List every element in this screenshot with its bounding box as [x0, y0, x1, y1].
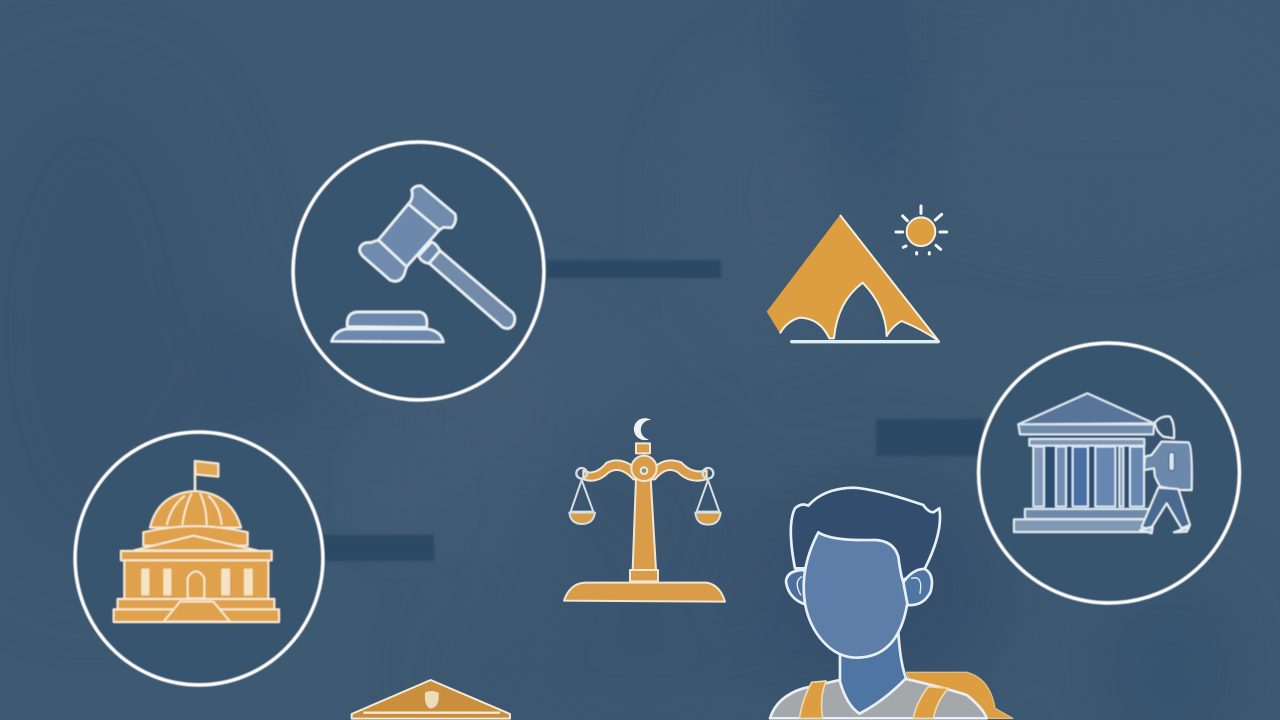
- panel: courthouse and student circle: [978, 343, 1240, 603]
- neck: [840, 632, 906, 714]
- crescent: [634, 418, 651, 440]
- panel: gavel circle: [293, 142, 544, 400]
- icon: student with backpack: [770, 488, 1013, 718]
- icon: tent-like mountain with sun: [767, 206, 947, 342]
- base: [564, 583, 725, 602]
- right pan: [695, 468, 721, 525]
- mountain: [767, 215, 938, 341]
- icon: scales of justice: [564, 418, 725, 602]
- icon: capitol building: [114, 461, 279, 622]
- ground line: [790, 340, 940, 344]
- right ear: [903, 569, 932, 605]
- sun: [896, 206, 947, 254]
- hair: [791, 488, 940, 582]
- icon: student walking: [1140, 416, 1192, 533]
- connector bar: temple to courthouse circle: [876, 419, 984, 456]
- connector bar: capitol circle: [322, 535, 434, 561]
- panel: capitol circle: [75, 432, 323, 685]
- pillar: [633, 478, 656, 570]
- backpack: [907, 672, 1013, 718]
- beam: [583, 460, 707, 481]
- icon: bottom pediment building: [352, 680, 510, 719]
- left ear: [786, 570, 805, 604]
- icon: gavel: [332, 186, 515, 342]
- mountain outline highlight: [780, 215, 938, 341]
- connector bar: gavel to temple: [546, 260, 721, 278]
- left pan: [569, 468, 595, 524]
- face: [804, 532, 907, 658]
- straps: [799, 681, 826, 718]
- shirt: [770, 678, 987, 718]
- icon: courthouse: [1014, 393, 1154, 532]
